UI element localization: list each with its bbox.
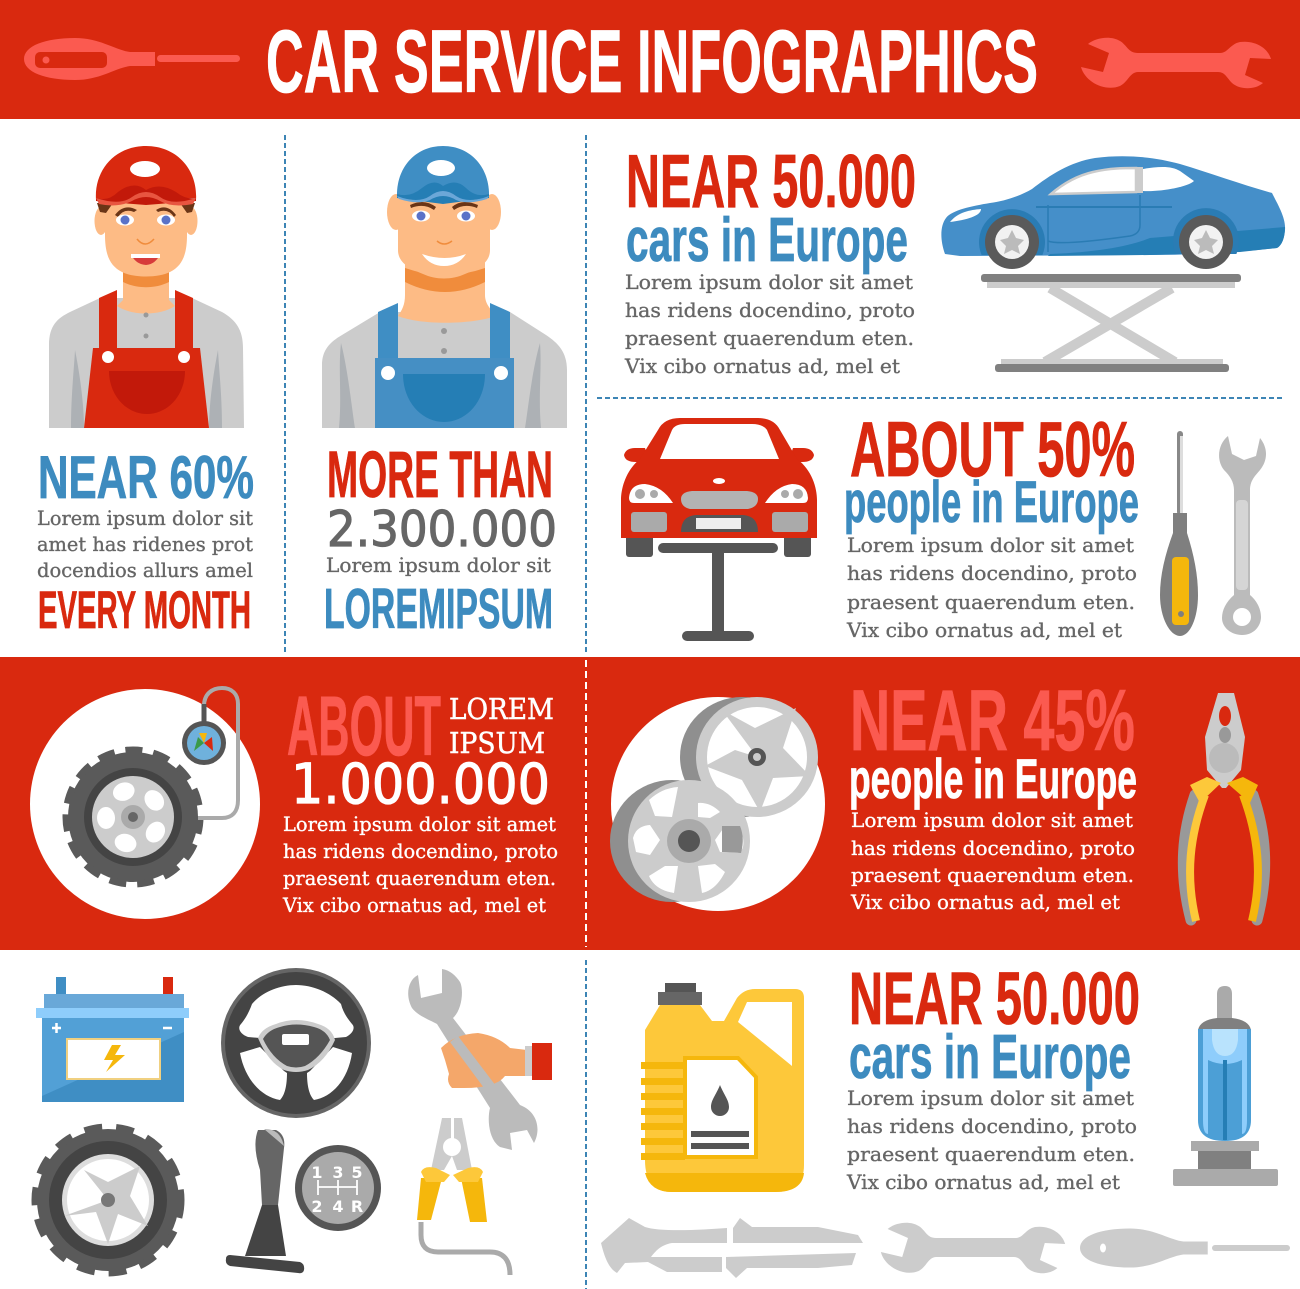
panel: people in Europe with red car <box>621 405 1266 642</box>
text block <box>282 812 558 917</box>
icon: red car on jack <box>621 418 817 641</box>
text block <box>850 808 1135 914</box>
heading: NEAR 50.000 <box>626 139 916 223</box>
icon: lower alloy rim <box>610 780 750 902</box>
text block: praesent quaerendum eten. <box>847 1142 1135 1166</box>
icon: screwdriver <box>1160 431 1198 636</box>
heading: NEAR 50.000 <box>849 957 1140 1040</box>
stat: 1.000.000: 1.000.000 <box>291 752 550 816</box>
text block: has ridens docendino, proto <box>625 298 915 322</box>
text block: Lorem ipsum dolor sit <box>37 506 253 530</box>
text block: Vix cibo ornatus ad, mel et <box>846 618 1122 642</box>
icon: gear knob: 5 <box>351 1163 363 1182</box>
heading: about: ABOUT <box>287 679 441 773</box>
icon: blue car <box>941 156 1285 269</box>
subheading: people in Europe <box>849 747 1137 810</box>
text block: Lorem ipsum dolor sit amet <box>625 270 913 294</box>
column dividers <box>285 135 1284 1289</box>
text block: docendios allurs amel <box>37 558 253 582</box>
icon: tire <box>66 750 200 884</box>
subheading: cars in Europe <box>849 1023 1131 1092</box>
text block: Vix cibo ornatus ad, mel et <box>850 890 1120 914</box>
text block: praesent quaerendum eten. <box>625 326 914 350</box>
heading: ABOUT 50% <box>850 405 1135 493</box>
text block <box>37 506 253 582</box>
text block: Lorem ipsum dolor sit amet <box>851 808 1133 832</box>
heading: lorem ipsum: LOREM <box>449 692 554 726</box>
text block: has ridens docendino, proto <box>851 836 1135 860</box>
icon: gear knob: R <box>351 1197 363 1216</box>
stat: near 60%: NEAR 60% <box>38 444 254 511</box>
icon: gray screwdriver <box>1080 1228 1290 1268</box>
text block: Vix cibo ornatus ad, mel et <box>846 1170 1120 1194</box>
panel: red mechanic <box>37 146 254 640</box>
text block: praesent quaerendum eten. <box>847 590 1135 614</box>
stat: more than: MORE THAN <box>327 437 553 511</box>
icon: gear knob: 3 <box>332 1163 344 1182</box>
text block: amet has ridenes prot <box>37 532 253 556</box>
icon: headlight bulb <box>1173 986 1278 1186</box>
icon: scissor lift <box>981 274 1241 372</box>
label: every month: EVERY MONTH <box>38 581 251 640</box>
icon: mechanic in red overalls <box>49 146 244 428</box>
icon: wrench <box>1081 38 1271 88</box>
panel: alloy wheels <box>610 673 1265 921</box>
middle red band <box>0 657 1300 950</box>
icon: spanner <box>1219 436 1266 635</box>
text block: Vix cibo ornatus ad, mel et <box>282 893 546 917</box>
header band <box>0 0 1300 119</box>
text block: Lorem ipsum dolor sit amet <box>847 1086 1134 1110</box>
panel: tire pressure <box>30 679 558 919</box>
heading: NEAR 45% <box>850 673 1135 769</box>
panel: cars in Europe with lift <box>624 139 1285 378</box>
icon: upper alloy rim <box>680 697 818 817</box>
icon: screwdriver <box>24 38 240 80</box>
panel: car parts icons <box>35 968 552 1275</box>
stat: 2.300.000: 2.300.000 <box>327 501 557 558</box>
text block: Lorem ipsum dolor sit amet <box>283 812 556 836</box>
icon: tire <box>35 1127 181 1273</box>
text block: praesent quaerendum eten. <box>851 863 1134 887</box>
icon: gray adjustable pliers <box>601 1218 863 1278</box>
icon: pressure gauge <box>182 688 238 818</box>
text block: Vix cibo ornatus ad, mel et <box>624 354 900 378</box>
text block: has ridens docendino, proto <box>283 839 558 863</box>
text block: has ridens docendino, proto <box>847 561 1137 585</box>
icon: gear knob <box>295 1145 381 1231</box>
text block <box>846 533 1137 642</box>
icon: battery <box>36 977 189 1102</box>
text line: Lorem ipsum dolor sit <box>326 553 551 577</box>
heading: lorem ipsum <box>449 692 554 760</box>
icon: jumper clamp <box>417 1118 510 1275</box>
icon: gear knob: 2 <box>311 1197 323 1216</box>
panel: blue mechanic <box>322 146 567 641</box>
icon: mechanic in blue overalls <box>322 146 567 428</box>
icon: oil canister <box>641 983 804 1192</box>
white circle backdrop <box>611 697 825 911</box>
icon: gray wrench <box>881 1223 1065 1273</box>
heading: lorem ipsum: IPSUM <box>449 726 545 760</box>
icon: gear stick <box>226 1129 304 1273</box>
white circle backdrop <box>30 689 260 919</box>
panel: oil, cars in Europe <box>601 957 1290 1278</box>
icon: pliers <box>1183 693 1265 921</box>
text block <box>846 1086 1137 1194</box>
icon: hand holding wrench <box>408 969 552 1150</box>
text block: Lorem ipsum dolor sit amet <box>847 533 1134 557</box>
icon: steering wheel <box>221 968 371 1118</box>
label: loremipsum: LOREMIPSUM <box>324 577 553 641</box>
icon: gear knob: 1 <box>311 1163 323 1182</box>
text block <box>624 270 915 378</box>
subheading: cars in Europe <box>626 206 908 275</box>
icon: gear knob: 4 <box>332 1197 344 1216</box>
text block: praesent quaerendum eten. <box>283 866 556 890</box>
text block: has ridens docendino, proto <box>847 1114 1137 1138</box>
